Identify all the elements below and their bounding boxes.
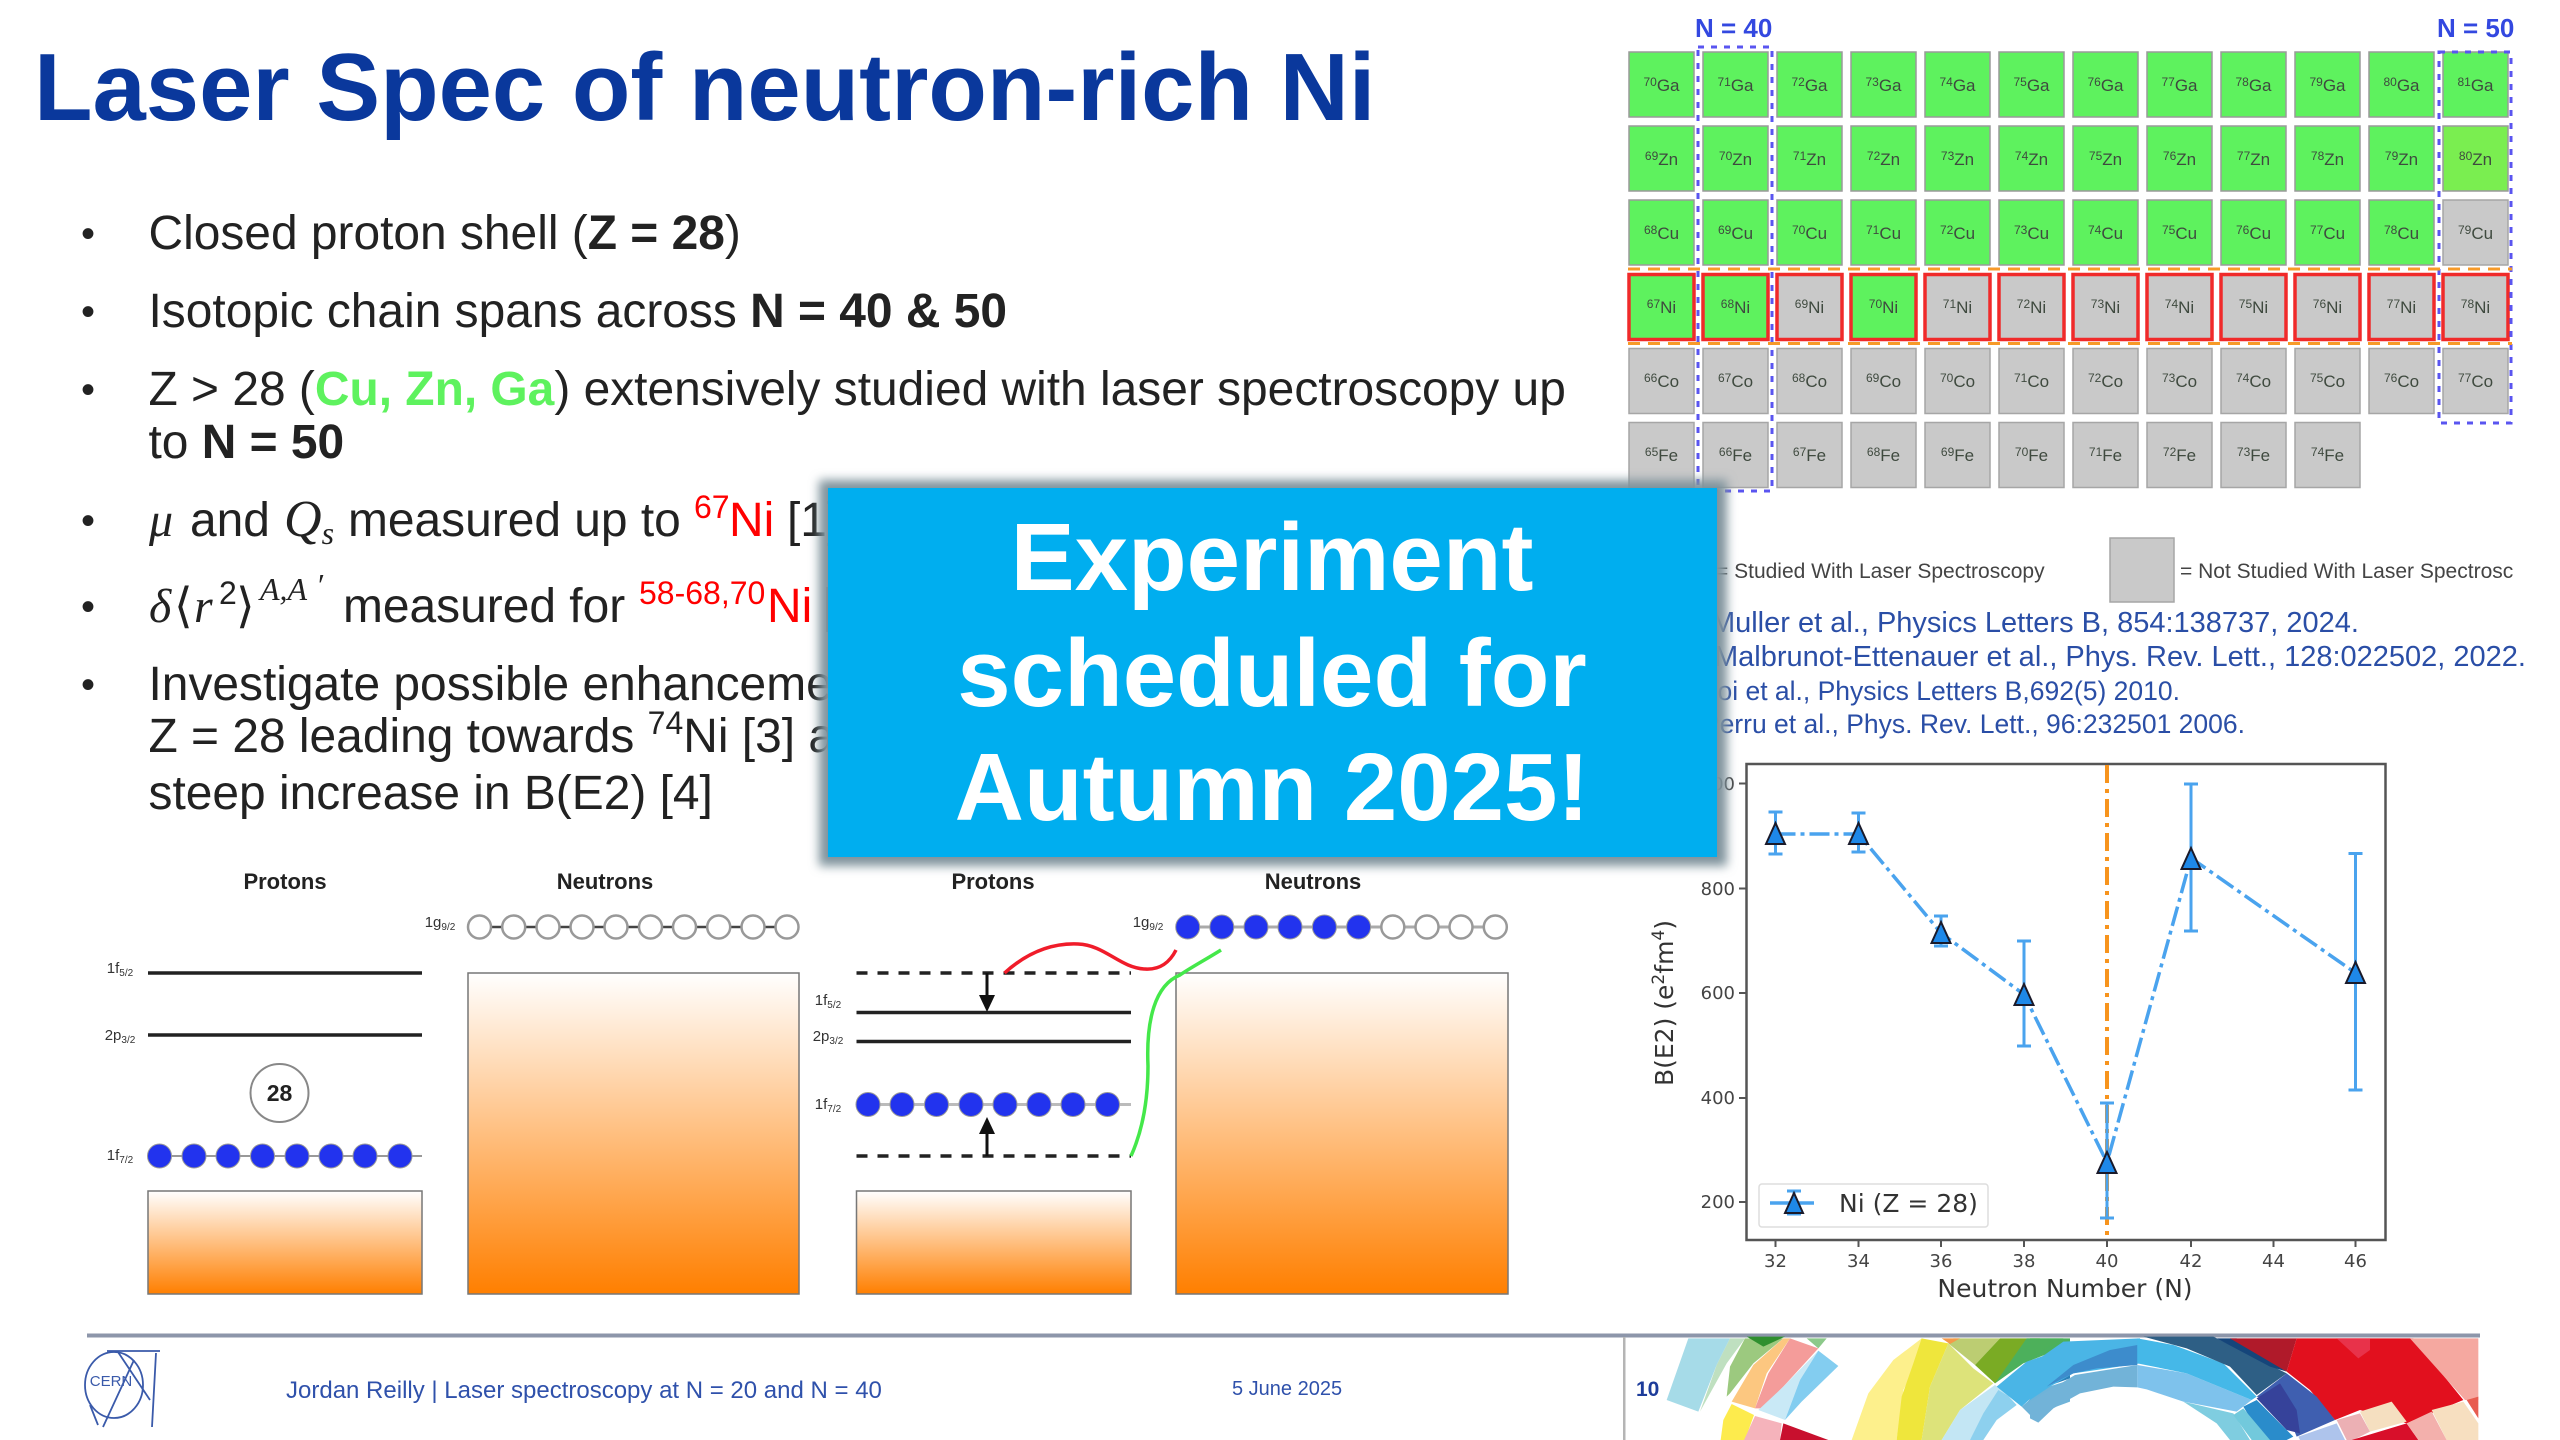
row: copper isotopes: Cu: [2249, 224, 2271, 243]
row: copper isotopes: Cu: [2397, 224, 2419, 243]
bullet: Z greater than 28: [81, 363, 1566, 469]
row: iron isotopes: Fe: [2324, 446, 2344, 465]
row: cobalt isotopes: 74: [2236, 371, 2250, 385]
proton levels with shifts: [813, 973, 1131, 1156]
proton core box: [856, 1191, 1131, 1294]
row: gallium isotopes: Ga: [2471, 76, 2494, 95]
row: zinc isotopes: Zn: [2176, 150, 2196, 169]
x axis ticks and labels: 36: [1930, 1251, 1952, 1272]
row: zinc isotopes: 72: [1867, 149, 1881, 163]
references: Perru et al., Phys. Rev. Lett., 96:232501 2006.: [1702, 709, 2245, 739]
heading: protons: Protons: [951, 869, 1035, 894]
callout: experiment scheduled: [819, 480, 1727, 866]
x axis ticks and labels: 46: [2344, 1251, 2367, 1272]
row: copper isotopes: Cu: [1953, 224, 1975, 243]
bullet: charge radii measured: Ni: [767, 580, 812, 633]
row: nickel isotopes: Ni: [1660, 298, 1676, 317]
row: nickel isotopes: Ni: [2030, 298, 2046, 317]
row: cobalt isotopes: Co: [2101, 372, 2123, 391]
proton levels with shifts: 2p: [813, 1028, 829, 1045]
row: copper isotopes: 77: [2310, 223, 2324, 237]
row: cobalt isotopes: Co: [1731, 372, 1753, 391]
row: gallium isotopes: 70: [1643, 75, 1657, 89]
row: zinc isotopes: Zn: [2472, 150, 2492, 169]
magic number 28: [250, 1064, 308, 1122]
bullet: investigate enhancement: •: [81, 663, 95, 707]
y axis ticks and labels: 200: [1701, 1192, 1735, 1213]
bullet: charge radii measured: 58-68,70: [639, 575, 765, 611]
error bars: [1768, 784, 2362, 1218]
bullet: moments measured: •: [81, 499, 95, 543]
proton core box: [148, 1191, 422, 1294]
date: 5 June 2025: [1232, 1378, 1342, 1400]
row: copper isotopes: 78: [2384, 223, 2398, 237]
legend swatch: not studied: [2110, 538, 2174, 602]
row: zinc isotopes: Zn: [1880, 150, 1900, 169]
row: nickel isotopes: Ni: [2252, 298, 2268, 317]
row: zinc isotopes: 80: [2459, 149, 2473, 163]
row: nickel isotopes: 73: [2091, 297, 2104, 311]
row: iron isotopes: Fe: [2250, 446, 2270, 465]
neutron open orbitals: 9/2: [441, 922, 456, 933]
references: Koi et al., Physics Letters B,692(5) 2010.: [1700, 676, 2180, 706]
neutron core box: [468, 973, 799, 1294]
row: cobalt isotopes: 72: [2088, 371, 2102, 385]
row: iron isotopes: 71: [2089, 445, 2103, 459]
y axis ticks and labels: [1689, 774, 1746, 1213]
legend for nuclide chart: [1716, 538, 2513, 602]
row: iron isotopes: Fe: [1732, 446, 1752, 465]
row: copper isotopes: Cu: [2027, 224, 2049, 243]
row: cobalt isotopes: 69: [1866, 371, 1880, 385]
row: gallium isotopes: 73: [1865, 75, 1879, 89]
row: nickel isotopes: 77: [2387, 297, 2400, 311]
row: cobalt isotopes: 66: [1644, 371, 1658, 385]
row: zinc isotopes: Zn: [1954, 150, 1974, 169]
proton occupied orbitals: [856, 1092, 1131, 1116]
row: zinc isotopes: 70: [1719, 149, 1733, 163]
row: nickel isotopes: Ni: [1808, 298, 1824, 317]
proton levels: 1f: [107, 960, 119, 977]
row: gallium isotopes: 79: [2309, 75, 2323, 89]
proton levels: 5/2: [119, 968, 134, 979]
bullet: charge radii measured: ′: [316, 567, 324, 603]
row: copper isotopes: 71: [1866, 223, 1880, 237]
row: iron isotopes: 69: [1941, 445, 1955, 459]
row: iron isotopes: Fe: [2028, 446, 2048, 465]
row: nickel isotopes: 72: [2017, 297, 2030, 311]
row: zinc isotopes: Zn: [1732, 150, 1752, 169]
bullet: charge radii measured: A,A: [258, 571, 308, 607]
nuclide chart: [1628, 13, 2514, 491]
callout: experiment scheduled: Autumn 2025!: [955, 734, 1589, 841]
row: nickel isotopes: 67: [1647, 297, 1660, 311]
row: iron isotopes: Fe: [1954, 446, 1974, 465]
red interaction curve: [1004, 944, 1176, 973]
row: copper isotopes: Cu: [1731, 224, 1753, 243]
row: cobalt isotopes: Co: [2175, 372, 2197, 391]
row: zinc isotopes: 77: [2237, 149, 2251, 163]
row: iron isotopes: 72: [2163, 445, 2177, 459]
row: gallium isotopes: 75: [2013, 75, 2027, 89]
bullet: charge radii measured: ⟨: [174, 579, 193, 634]
bullet: closed proton shell: •: [81, 212, 95, 256]
row: zinc isotopes: 71: [1793, 149, 1807, 163]
row: nickel isotopes: 69: [1795, 297, 1808, 311]
row: gallium isotopes: Ga: [1657, 76, 1680, 95]
row: cobalt isotopes: 67: [1718, 371, 1732, 385]
heading: protons: Protons: [243, 869, 327, 894]
x axis ticks and labels: 32: [1764, 1251, 1787, 1272]
row: copper isotopes: Cu: [1805, 224, 1827, 243]
row: zinc isotopes: Zn: [2028, 150, 2048, 169]
row: gallium isotopes: Ga: [2027, 76, 2050, 95]
row: gallium isotopes: 80: [2383, 75, 2397, 89]
decorative colour arcs left: [1667, 1337, 2070, 1440]
row: iron isotopes: 66: [1719, 445, 1733, 459]
row: copper isotopes: 68: [1644, 223, 1658, 237]
row: cobalt isotopes: [1629, 348, 2508, 414]
CERN logo: [85, 1351, 160, 1427]
row: copper isotopes: 74: [2088, 223, 2102, 237]
row: gallium isotopes: Ga: [1879, 76, 1902, 95]
x axis ticks and labels: [1764, 1240, 2367, 1272]
row: gallium isotopes: Ga: [2175, 76, 2198, 95]
proton levels with shifts: 3/2: [829, 1036, 844, 1047]
heading: neutrons: Neutrons: [1265, 869, 1361, 894]
bullet: isotopic chain: •: [81, 290, 95, 334]
row: nickel isotopes: Ni: [2400, 298, 2416, 317]
bullet: Z greater than 28: •: [81, 368, 95, 412]
row: iron isotopes: Fe: [1806, 446, 1826, 465]
bullet: charge radii measured: [2]: [823, 580, 876, 633]
row: nickel isotopes: [1629, 274, 2508, 340]
N = 40 dashed box: [1698, 47, 1772, 491]
neutron partially filled orbitals: 1g: [1133, 914, 1149, 931]
bullet: moments measured: and: [190, 494, 270, 547]
row: copper isotopes: Cu: [2471, 224, 2493, 243]
shell diagram: tensor-driven shift: [813, 869, 1508, 1294]
references: Malbrunot-Ettenauer et al., Phys. Rev. Lett., 128:022502, 2022.: [1714, 641, 2526, 673]
row: gallium isotopes: 76: [2087, 75, 2101, 89]
row: cobalt isotopes: Co: [1879, 372, 1901, 391]
row: cobalt isotopes: 73: [2162, 371, 2176, 385]
chart legend: Ni (Z = 28): [1839, 1189, 1978, 1218]
row: zinc isotopes: Zn: [2102, 150, 2122, 169]
row: gallium isotopes: Ga: [1731, 76, 1754, 95]
y axis ticks and labels: 800: [1701, 879, 1735, 900]
row: iron isotopes: 73: [2237, 445, 2251, 459]
callout: experiment scheduled: scheduled for: [957, 620, 1587, 727]
y axis label: fm: [1650, 941, 1679, 974]
presenter and talk title: Jordan Reilly | Laser spectroscopy at N = 20 and N = 40: [286, 1377, 882, 1404]
bullet: moments measured: [1]: [787, 494, 840, 547]
row: nickel isotopes: 76: [2313, 297, 2326, 311]
row: copper isotopes: 70: [1792, 223, 1806, 237]
references: Muller et al., Physics Letters B, 854:138737, 2024.: [1711, 607, 2359, 639]
row: copper isotopes: 79: [2458, 223, 2472, 237]
bullet: closed proton shell: Closed proton shell (Z = 28): [148, 207, 741, 260]
y axis ticks and labels: 600: [1701, 983, 1735, 1004]
row: cobalt isotopes: Co: [2027, 372, 2049, 391]
row: cobalt isotopes: Co: [1953, 372, 1975, 391]
row: nickel isotopes: 74: [2165, 297, 2178, 311]
row: nickel isotopes: 75: [2239, 297, 2252, 311]
bullet: investigate enhancement: Z = 28 leading towards: [148, 710, 634, 763]
neutron core box: [1176, 973, 1508, 1294]
row: nickel isotopes: 78: [2461, 297, 2474, 311]
row: cobalt isotopes: Co: [1805, 372, 1827, 391]
row: nickel isotopes: Ni: [2104, 298, 2120, 317]
row: zinc isotopes: Zn: [2250, 150, 2270, 169]
label: N = 50: N = 50: [2437, 13, 2514, 43]
proton levels with shifts: 1f: [815, 1096, 827, 1113]
bullet: moments measured: 67: [694, 489, 730, 525]
data line: [1776, 834, 2356, 1162]
label: N = 40: N = 40: [1695, 13, 1772, 43]
row: iron isotopes: 68: [1867, 445, 1881, 459]
row: cobalt isotopes: 77: [2458, 371, 2472, 385]
row: iron isotopes: Fe: [1658, 446, 1678, 465]
shell diagram: closed shell: [105, 869, 799, 1294]
row: iron isotopes: [1629, 422, 2360, 488]
proton levels: 2p: [105, 1027, 121, 1044]
divider: [1623, 1337, 1626, 1440]
bullet: investigate enhancement: Ni [3] and: [683, 710, 888, 763]
bullet: charge radii measured: 2: [219, 575, 237, 611]
row: zinc isotopes: 76: [2163, 149, 2177, 163]
neutron open orbitals: [425, 914, 798, 938]
bullet: moments measured: s: [322, 515, 334, 551]
row: iron isotopes: 74: [2311, 445, 2325, 459]
row: copper isotopes: Cu: [1879, 224, 1901, 243]
N = 40 reference line: [2105, 765, 2109, 1239]
row: cobalt isotopes: 76: [2384, 371, 2398, 385]
bullet: investigate enhancement: steep increase in B(E2) [4]: [148, 767, 713, 820]
proton levels: 3/2: [121, 1035, 136, 1046]
row: zinc isotopes: 75: [2089, 149, 2103, 163]
row: nickel isotopes: Ni: [1734, 298, 1750, 317]
x axis label: Neutron Number (N): [1937, 1274, 2193, 1303]
row: copper isotopes: 69: [1718, 223, 1732, 237]
row: copper isotopes: 76: [2236, 223, 2250, 237]
row: gallium isotopes: 77: [2161, 75, 2175, 89]
y axis label: B(E2) (e: [1650, 985, 1679, 1086]
row: zinc isotopes: Zn: [2324, 150, 2344, 169]
x axis ticks and labels: 40: [2096, 1251, 2118, 1272]
decorative colour arcs right: [2030, 1337, 2478, 1440]
CERN logo: CERN: [90, 1373, 132, 1390]
bullet: moments measured: Q: [284, 491, 322, 548]
plot frame: [1746, 764, 2386, 1240]
bullet: moments measured: Ni: [729, 494, 774, 547]
row: nickel isotopes: 70: [1869, 297, 1882, 311]
data markers: [1766, 823, 2365, 1173]
row: cobalt isotopes: 71: [2014, 371, 2028, 385]
nickel chain dashed box: [1628, 269, 2512, 344]
arrow: level raising: [979, 1117, 995, 1156]
row: iron isotopes: 70: [2015, 445, 2029, 459]
row: gallium isotopes: 81: [2457, 75, 2471, 89]
row: zinc isotopes: 74: [2015, 149, 2029, 163]
row: cobalt isotopes: 75: [2310, 371, 2324, 385]
bullet: Z greater than 28: to N = 50: [148, 416, 344, 469]
row: cobalt isotopes: 70: [1940, 371, 1954, 385]
legend: not studied: = Not Studied With Laser Spectrosc: [2180, 560, 2513, 583]
row: nickel isotopes: Ni: [2474, 298, 2490, 317]
x axis ticks and labels: 42: [2180, 1251, 2202, 1272]
row: copper isotopes: 72: [1940, 223, 1954, 237]
row: nickel isotopes: Ni: [1956, 298, 1972, 317]
row: gallium isotopes: 71: [1717, 75, 1731, 89]
bullet: charge radii measured: •: [81, 585, 95, 629]
row: nickel isotopes: 71: [1943, 297, 1956, 311]
x axis ticks and labels: 38: [2013, 1251, 2035, 1272]
bullet: isotopic chain: Isotopic chain spans across N = 40 & 50: [148, 285, 1007, 338]
legend: studied: = Studied With Laser Spectroscopy: [1716, 560, 2045, 583]
page number: 10: [1636, 1378, 1659, 1401]
row: iron isotopes: 67: [1793, 445, 1807, 459]
row: zinc isotopes: 69: [1645, 149, 1659, 163]
bullet: charge radii measured: r: [194, 580, 213, 633]
y axis label: 2: [1649, 974, 1669, 985]
row: gallium isotopes: Ga: [2101, 76, 2124, 95]
x axis ticks and labels: 34: [1847, 1251, 1870, 1272]
row: iron isotopes: Fe: [2102, 446, 2122, 465]
row: nickel isotopes: Ni: [2178, 298, 2194, 317]
row: gallium isotopes: Ga: [2323, 76, 2346, 95]
row: copper isotopes: 73: [2014, 223, 2028, 237]
y axis label: 4: [1649, 930, 1669, 941]
row: cobalt isotopes: Co: [1657, 372, 1679, 391]
bullet list: [81, 207, 1566, 820]
row: zinc isotopes: [1629, 126, 2508, 191]
row: copper isotopes: 75: [2162, 223, 2176, 237]
bullet: moments measured: μ: [148, 494, 173, 547]
row: copper isotopes: Cu: [2101, 224, 2123, 243]
title: Laser Spec of neutron-rich Ni: [34, 34, 1375, 141]
neutron partially filled orbitals: 9/2: [1149, 922, 1164, 933]
bullet: investigate enhancement: Investigate possible enhancement: [148, 658, 873, 711]
proton levels: [105, 960, 422, 1166]
proton levels: 1f: [107, 1147, 119, 1164]
bullet: investigate enhancement: [81, 658, 888, 820]
proton levels with shifts: 5/2: [827, 1000, 842, 1011]
row: cobalt isotopes: Co: [2397, 372, 2419, 391]
callout: experiment scheduled: Experiment: [1011, 504, 1533, 611]
row: gallium isotopes: 74: [1939, 75, 1953, 89]
row: zinc isotopes: 73: [1941, 149, 1955, 163]
row: iron isotopes: Fe: [2176, 446, 2196, 465]
B(E2) chart: [1649, 764, 2386, 1303]
y axis ticks and labels: 1000: [1689, 774, 1735, 795]
arrow: level lowering: [979, 973, 995, 1012]
row: copper isotopes: [1629, 200, 2508, 265]
green interaction curve: [1131, 950, 1221, 1156]
row: copper isotopes: Cu: [1657, 224, 1679, 243]
row: zinc isotopes: 79: [2385, 149, 2399, 163]
proton levels with shifts: 1f: [815, 992, 827, 1009]
references: [1700, 607, 2526, 739]
row: gallium isotopes: Ga: [1953, 76, 1976, 95]
chart legend: [1759, 1184, 1988, 1227]
row: cobalt isotopes: 68: [1792, 371, 1806, 385]
bullet: charge radii measured: ⟩: [236, 579, 255, 634]
neutron open orbitals: 1g: [425, 914, 441, 931]
row: copper isotopes: Cu: [2175, 224, 2197, 243]
bullet: charge radii measured: [81, 567, 876, 634]
row: nickel isotopes: 68: [1721, 297, 1734, 311]
row: gallium isotopes: Ga: [2397, 76, 2420, 95]
proton levels with shifts: 7/2: [827, 1104, 842, 1115]
row: nickel isotopes: Ni: [1882, 298, 1898, 317]
row: gallium isotopes: Ga: [1805, 76, 1828, 95]
row: iron isotopes: 65: [1645, 445, 1659, 459]
row: cobalt isotopes: Co: [2471, 372, 2493, 391]
row: gallium isotopes: 72: [1791, 75, 1805, 89]
bullet: charge radii measured: δ: [149, 580, 172, 633]
bullet: charge radii measured: measured for: [343, 580, 625, 633]
row: zinc isotopes: Zn: [1806, 150, 1826, 169]
neutron partially filled orbitals: [1133, 914, 1507, 939]
row: zinc isotopes: 78: [2311, 149, 2325, 163]
heading: neutrons: Neutrons: [557, 869, 653, 894]
bullet: moments measured: [81, 489, 840, 551]
y axis ticks and labels: 400: [1701, 1088, 1735, 1109]
y axis label: ): [1650, 920, 1679, 930]
row: zinc isotopes: Zn: [2398, 150, 2418, 169]
proton levels: 7/2: [119, 1155, 134, 1166]
row: nickel isotopes: Ni: [2326, 298, 2342, 317]
row: iron isotopes: Fe: [1880, 446, 1900, 465]
footer: [85, 1334, 2480, 1440]
footer rule: [87, 1334, 2480, 1338]
bullet: Z greater than 28: Z > 28 (Cu, Zn, Ga) extensively studied with laser spectroscopy up: [148, 363, 1566, 416]
row: gallium isotopes: Ga: [2249, 76, 2272, 95]
row: gallium isotopes: 78: [2235, 75, 2249, 89]
bullet: investigate enhancement: 74: [648, 705, 683, 741]
row: copper isotopes: Cu: [2323, 224, 2345, 243]
proton occupied orbitals: [148, 1144, 422, 1168]
N = 50 dashed box: [2439, 52, 2511, 423]
bullet: moments measured: measured up to: [348, 494, 681, 547]
row: zinc isotopes: Zn: [1658, 150, 1678, 169]
row: cobalt isotopes: Co: [2323, 372, 2345, 391]
magic number 28: 28: [267, 1080, 292, 1106]
x axis ticks and labels: 44: [2262, 1251, 2285, 1272]
row: cobalt isotopes: Co: [2249, 372, 2271, 391]
row: gallium isotopes: [1629, 52, 2508, 117]
